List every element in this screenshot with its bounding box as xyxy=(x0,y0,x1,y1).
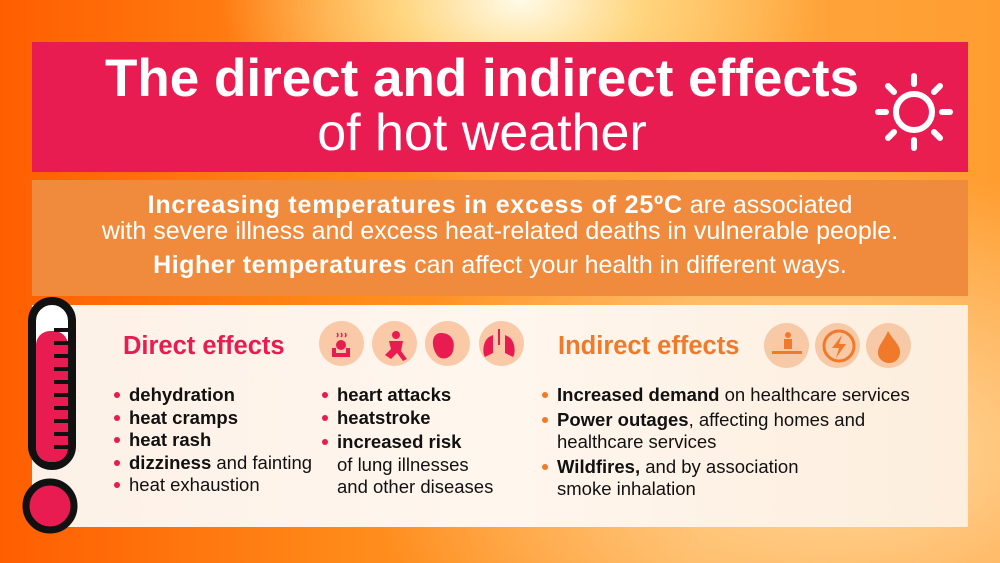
list: indirect xyxy=(542,384,910,499)
list: indirect: Power outages, affecting homes and xyxy=(557,408,865,430)
list: indirect: healthcare services xyxy=(557,431,716,452)
icons: direct xyxy=(319,321,524,366)
title: The direct and indirect effects xyxy=(105,49,859,108)
title xyxy=(105,49,859,162)
title: of hot weather xyxy=(317,104,647,162)
intro band: Increasing temperatures in excess of 25ºC are associated xyxy=(148,191,852,219)
list: direct col 2: heatstroke xyxy=(337,406,431,428)
panel: effects xyxy=(32,305,968,527)
icon: thermometer xyxy=(22,297,78,534)
list: direct col 2: and other diseases xyxy=(337,476,493,497)
heading: direct effects: Direct effects xyxy=(123,332,285,360)
icon: sun xyxy=(875,73,953,151)
icons: indirect xyxy=(764,323,911,368)
heading: indirect effects: Indirect effects xyxy=(558,332,739,360)
intro band xyxy=(32,180,968,296)
list: indirect: Wildfires, and by association xyxy=(557,456,798,476)
intro band: Higher temperatures can affect your health in different ways. xyxy=(153,251,847,279)
list: direct col 1 xyxy=(114,384,312,495)
list: direct col 1: heat exhaustion xyxy=(129,474,260,495)
list: direct col 2: increased risk xyxy=(337,431,461,452)
title band xyxy=(32,42,968,172)
list: direct col 1: dizziness and fainting xyxy=(129,452,312,472)
intro band: with severe illness and excess heat-related deaths in vulnerable people. xyxy=(102,217,898,245)
list: indirect: Increased demand on healthcare services xyxy=(557,384,910,405)
list: direct col 2 xyxy=(322,384,493,497)
list: direct col 2: heart attacks xyxy=(337,384,451,405)
list: indirect: smoke inhalation xyxy=(557,478,696,499)
list: direct col 2: of lung illnesses xyxy=(337,454,469,474)
list: direct col 1: heat cramps xyxy=(129,406,238,428)
list: direct col 1: dehydration xyxy=(129,384,235,405)
list: direct col 1: heat rash xyxy=(129,429,211,450)
